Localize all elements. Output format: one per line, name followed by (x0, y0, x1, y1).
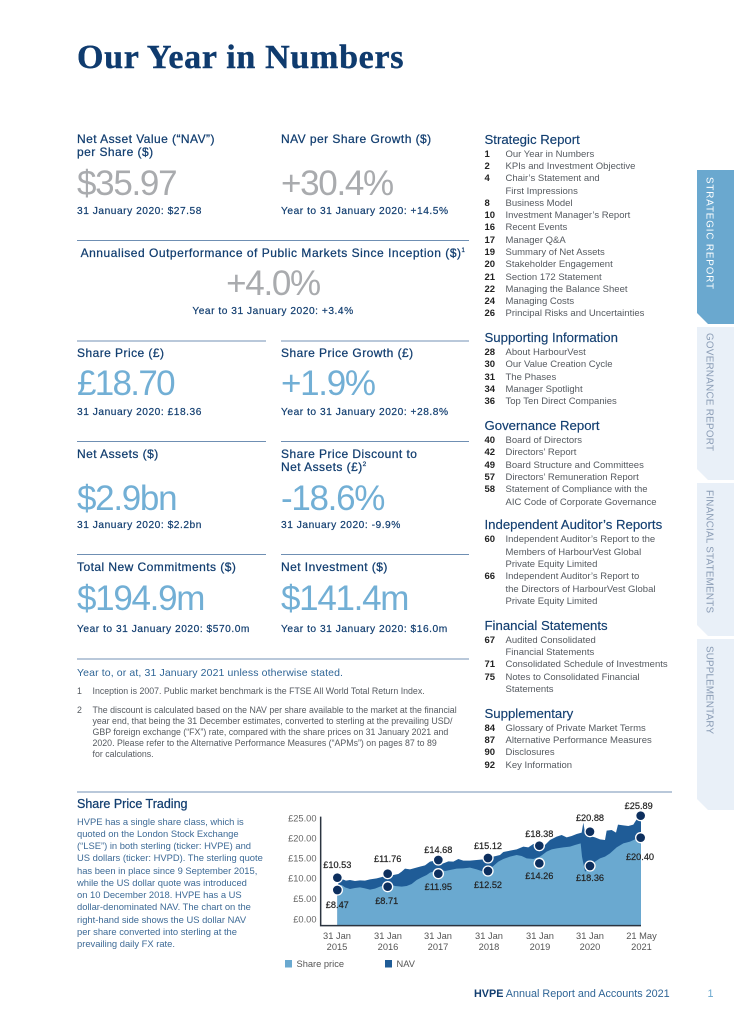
contents: governance report: 40 (484, 435, 495, 446)
contents: governance report: Board Structure and Committees (506, 460, 644, 471)
tab: financial statements (697, 483, 734, 636)
value labels: £20.40 (626, 852, 654, 862)
value labels: £8.47 (326, 900, 349, 910)
KPI: net investment (281, 560, 448, 634)
x axis labels: 21 May (626, 931, 657, 941)
footer: HVPE Annual Report and Accounts 2021 (474, 988, 670, 1000)
footnote 2: GBP foreign exchange (“FX”) rate, compared with the share prices on 31 January 2021 and (92, 727, 448, 737)
share price trading text: US dollars (ticker: HVPD). The sterling quote (77, 852, 263, 863)
y axis labels: £5.00 (293, 894, 316, 904)
share price trading text: (“LSE”) in both sterling (ticker: HVPE) and (77, 840, 251, 851)
contents: financial statements: 71 (484, 659, 495, 670)
contents: financial statements: Audited Consolidated (506, 635, 596, 646)
contents: strategic report: 26 (484, 308, 495, 319)
footnote 2: for calculations. (92, 749, 154, 759)
footnote 2: 2020. Please refer to the Alternative Performance Measures (“APMs”) on pages 87 to 89 (92, 738, 437, 748)
legend: Share price (296, 959, 344, 969)
contents: supporting information: Top Ten Direct Companies (506, 396, 617, 407)
value labels: £8.71 (375, 896, 398, 906)
value labels: £11.95 (425, 882, 452, 892)
contents: strategic report: 16 (484, 222, 495, 233)
legend: NAV (396, 959, 416, 969)
contents: supplementary: 84 (484, 723, 495, 734)
KPI: share price (77, 346, 202, 418)
contents: governance report: Directors’ Remuneration Report (506, 472, 639, 483)
section heading: Independent Auditor’s Reports (484, 517, 662, 532)
KPI comparison: 31 January 2020: $27.58 (77, 206, 202, 216)
contents: supplementary: 87 (484, 735, 495, 746)
share price trading text: HVPE has a single share class, which is (77, 816, 244, 826)
KPI value: -18.6% (281, 479, 384, 518)
share price trading text: right-hand side shows the US dollar NAV (77, 914, 246, 924)
KPI heading: Total New Commitments ($) (77, 560, 236, 574)
section heading: Supporting Information (484, 330, 618, 345)
contents: governance report: Board of Directors (506, 435, 582, 446)
KPI value: +4.0% (226, 264, 320, 303)
x axis labels: 2020 (580, 942, 600, 952)
value labels: £14.26 (525, 871, 553, 881)
footnote 2: 2 (77, 705, 82, 715)
page number: 1 (708, 988, 714, 1000)
contents: governance report (484, 418, 657, 508)
share price trading text: quoted on the London Stock Exchange (77, 828, 239, 839)
x axis labels: 31 Jan (475, 931, 503, 941)
contents: strategic report: 2 (484, 161, 490, 172)
contents: strategic report: 8 (484, 198, 490, 209)
contents: supplementary: Glossary of Private Market Terms (506, 723, 646, 734)
footnote 2: The discount is calculated based on the NAV per share available to the market at the financial (92, 705, 457, 715)
contents: strategic report: 10 (484, 210, 495, 221)
statement note: Year to, or at, 31 January 2021 unless otherwise stated. (77, 666, 343, 678)
tab: supplementary: SUPPLEMENTARY (704, 646, 714, 734)
x axis labels: 31 Jan (526, 931, 554, 941)
y axis labels: £25.00 (288, 814, 316, 824)
contents: strategic report: Business Model (506, 198, 573, 209)
data points (332, 811, 646, 895)
contents: strategic report: Principal Risks and Uncertainties (506, 308, 644, 319)
y axis labels: £0.00 (293, 914, 316, 924)
value labels: £12.52 (474, 880, 502, 890)
x axis labels (323, 931, 657, 952)
contents: strategic report: Recent Events (506, 222, 567, 233)
contents: governance report: AIC Code of Corporate Governance (506, 496, 657, 508)
contents: strategic report: Summary of Net Assets (506, 247, 605, 258)
contents: independent auditor's reports: 60 (484, 534, 495, 545)
contents: governance report: Directors’ Report (506, 447, 576, 458)
contents: supporting information: Our Value Creation Cycle (506, 359, 613, 370)
contents: independent auditor's reports: Independent Auditor’s Report to (506, 571, 639, 582)
value labels: £10.53 (323, 860, 351, 870)
KPI comparison: Year to 31 January 2020: +14.5% (281, 206, 449, 216)
contents: independent auditor's reports (484, 517, 662, 607)
contents: strategic report: Investment Manager’s Report (506, 210, 630, 221)
tab: strategic report: STRATEGIC REPORT (704, 177, 714, 289)
NAV area (337, 814, 641, 926)
section heading: Supplementary (484, 706, 573, 720)
KPI heading: NAV per Share Growth ($) (281, 132, 432, 146)
contents: supporting information (484, 330, 618, 407)
value labels: £18.38 (525, 829, 553, 839)
contents: supplementary: Alternative Performance Measures (506, 735, 652, 746)
KPI heading: Net Assets (£)2 (281, 460, 367, 474)
axes (321, 817, 641, 926)
KPI: net assets (77, 447, 202, 530)
contents: strategic report: Managing the Balance Sheet (506, 284, 628, 295)
KPI comparison: Year to 31 January 2020: +3.4% (192, 306, 354, 316)
y axis labels: £10.00 (288, 874, 316, 884)
x axis labels: 2016 (378, 942, 398, 952)
section heading: Financial Statements (484, 618, 608, 632)
KPI comparison: Year to 31 January 2020: $570.0m (77, 624, 250, 634)
x axis labels: 31 Jan (374, 931, 402, 941)
contents: strategic report: Managing Costs (506, 296, 574, 307)
value labels: £25.89 (625, 801, 653, 811)
KPI value: $194.9m (77, 579, 204, 618)
contents: strategic report: 17 (484, 235, 495, 246)
KPI heading: Net Assets ($) (77, 447, 159, 461)
share price area (337, 837, 641, 926)
contents: supporting information: About HarbourVest (506, 347, 586, 358)
KPI: annualised outperformance (80, 246, 465, 316)
KPI comparison: 31 January 2020: -9.9% (281, 520, 401, 530)
KPI: total new commitments (77, 560, 250, 634)
y axis labels: £15.00 (288, 854, 316, 864)
contents: independent auditor's reports: Members of HarbourVest Global (506, 547, 641, 558)
contents: supporting information: 28 (484, 347, 495, 358)
tab: strategic report (697, 170, 734, 324)
contents: financial statements: 67 (484, 635, 495, 646)
KPI heading: Net Asset Value (“NAV”) (77, 132, 215, 146)
contents: independent auditor's reports: 66 (484, 571, 495, 582)
x axis labels: 2019 (530, 942, 550, 952)
KPI: NAV per share growth (281, 132, 449, 216)
contents: supporting information: 36 (484, 396, 495, 407)
y axis labels (288, 814, 316, 924)
KPI value: +30.4% (281, 164, 393, 203)
contents: supporting information: Manager Spotlight (506, 384, 583, 395)
KPI: share price discount (281, 447, 417, 530)
contents: strategic report: 21 (484, 272, 495, 283)
KPI comparison: Year to 31 January 2020: +28.8% (281, 406, 449, 418)
KPI heading: per Share ($) (77, 145, 154, 159)
value labels: £15.12 (474, 841, 502, 851)
tab: financial statements: FINANCIAL STATEMENTS (704, 490, 714, 613)
KPI: net asset value per share (77, 132, 215, 216)
KPI: share price growth (281, 346, 449, 418)
contents: strategic report: 4 (484, 173, 490, 184)
contents: strategic report: 24 (484, 296, 495, 307)
KPI value: $2.9bn (77, 479, 176, 518)
KPI comparison: Year to 31 January 2020: $16.0m (281, 624, 448, 634)
contents: strategic report: Section 172 Statement (506, 272, 602, 283)
share price trading text: dollar-denominated NAV. The chart on the (77, 901, 251, 912)
contents: independent auditor's reports: Independent Auditor’s Report to the (506, 534, 655, 545)
KPI heading: Annualised Outperformance of Public Markets Since Inception ($)1 (81, 246, 465, 260)
contents: strategic report: KPIs and Investment Objective (506, 161, 635, 172)
share price trading text: per share converted into sterling at the (77, 926, 237, 937)
x axis labels: 31 Jan (576, 931, 604, 941)
x axis labels: 2015 (327, 942, 347, 952)
KPI value: £18.70 (77, 364, 174, 403)
text: Inception is 2007. Public market benchmark is the FTSE All World Total Return Index. (92, 686, 425, 696)
contents: strategic report: 20 (484, 259, 495, 270)
contents: governance report: 49 (484, 460, 495, 471)
section heading: Strategic Report (484, 132, 580, 146)
contents: strategic report: 1 (484, 149, 490, 160)
contents: strategic report: First Impressions (506, 186, 578, 197)
contents: supporting information: 31 (484, 372, 495, 383)
KPI value: +1.9% (281, 364, 375, 403)
contents: strategic report (484, 132, 644, 319)
contents: financial statements: Consolidated Schedule of Investments (506, 659, 668, 670)
legend (285, 959, 416, 969)
contents: supplementary: 92 (484, 760, 495, 771)
contents: independent auditor's reports: the Directors of HarbourVest Global (506, 584, 655, 595)
KPI heading: Share Price Discount to (281, 447, 417, 461)
contents: supplementary: Disclosures (506, 747, 555, 758)
share price trading text: on 10 December 2018. HVPE has a US (77, 889, 242, 900)
contents: strategic report: Chair’s Statement and (506, 173, 600, 184)
tab: supplementary (697, 639, 734, 810)
contents: supporting information: The Phases (506, 372, 556, 383)
x axis labels: 31 Jan (424, 931, 452, 941)
share price trading text: has been in place since 9 September 2015, (77, 864, 257, 876)
contents: supplementary: 90 (484, 747, 495, 758)
footnote 1: 1 (77, 686, 82, 696)
x axis labels: 2021 (631, 942, 652, 952)
contents: financial statements: Financial Statements (506, 647, 594, 658)
contents: strategic report: 19 (484, 247, 495, 258)
share price trading text (77, 816, 263, 949)
share price trading text: while the US dollar quote was introduced (77, 877, 247, 888)
KPI heading: Net Investment ($) (281, 560, 388, 574)
footnote 2 (77, 705, 457, 759)
contents: strategic report: Manager Q&A (506, 235, 566, 246)
KPI value: $141.4m (281, 579, 408, 618)
x axis labels: 31 Jan (323, 931, 351, 941)
contents: financial statements: 75 (484, 672, 495, 683)
tab: governance report (697, 327, 734, 480)
KPI heading: Share Price (£) (77, 346, 164, 360)
title: Our Year in Numbers (77, 39, 404, 76)
contents: governance report: 58 (484, 484, 495, 495)
y axis labels: £20.00 (288, 834, 316, 844)
contents: supplementary: Key Information (506, 760, 572, 771)
value labels (323, 801, 654, 910)
footnote 1 (77, 686, 425, 696)
KPI heading (281, 447, 417, 474)
contents: supporting information: 30 (484, 359, 495, 370)
contents: strategic report: Our Year in Numbers (506, 149, 594, 160)
KPI value: $35.97 (77, 164, 176, 203)
value labels: £11.76 (374, 854, 401, 864)
tab: governance report: GOVERNANCE REPORT (704, 333, 714, 451)
share price trading heading: Share Price Trading (77, 797, 187, 811)
section heading: Governance Report (484, 418, 600, 433)
contents: independent auditor's reports: Private Equity Limited (506, 596, 597, 607)
KPI comparison: 31 January 2020: $2.2bn (77, 520, 202, 530)
contents: supplementary (484, 706, 652, 771)
x axis labels: 2018 (479, 942, 499, 952)
contents: financial statements (484, 618, 668, 695)
contents: governance report: Statement of Compliance with the (506, 484, 648, 495)
contents: financial statements: Statements (506, 684, 554, 695)
value labels: £18.36 (576, 873, 604, 883)
contents: governance report: 42 (484, 447, 495, 458)
value labels: £20.88 (576, 813, 604, 823)
chart areas (321, 811, 646, 926)
contents: governance report: 57 (484, 472, 495, 483)
contents: financial statements: Notes to Consolidated Financial (506, 672, 640, 683)
contents: strategic report: Stakeholder Engagement (506, 259, 613, 270)
contents: supporting information: 34 (484, 384, 495, 395)
KPI heading (77, 132, 215, 159)
x axis labels: 2017 (428, 942, 448, 952)
contents: strategic report: 22 (484, 284, 495, 295)
contents: independent auditor's reports: Private Equity Limited (506, 559, 597, 570)
value labels: £14.68 (424, 845, 452, 855)
KPI comparison: 31 January 2020: £18.36 (77, 406, 202, 418)
chart: share price vs NAV (285, 801, 657, 969)
KPI heading: Share Price Growth (£) (281, 346, 414, 360)
share price trading text: prevailing daily FX rate. (77, 938, 175, 949)
footnote 2: year end, that being the 31 December estimates, converted to sterling at the prevailing USD/ (92, 716, 452, 726)
